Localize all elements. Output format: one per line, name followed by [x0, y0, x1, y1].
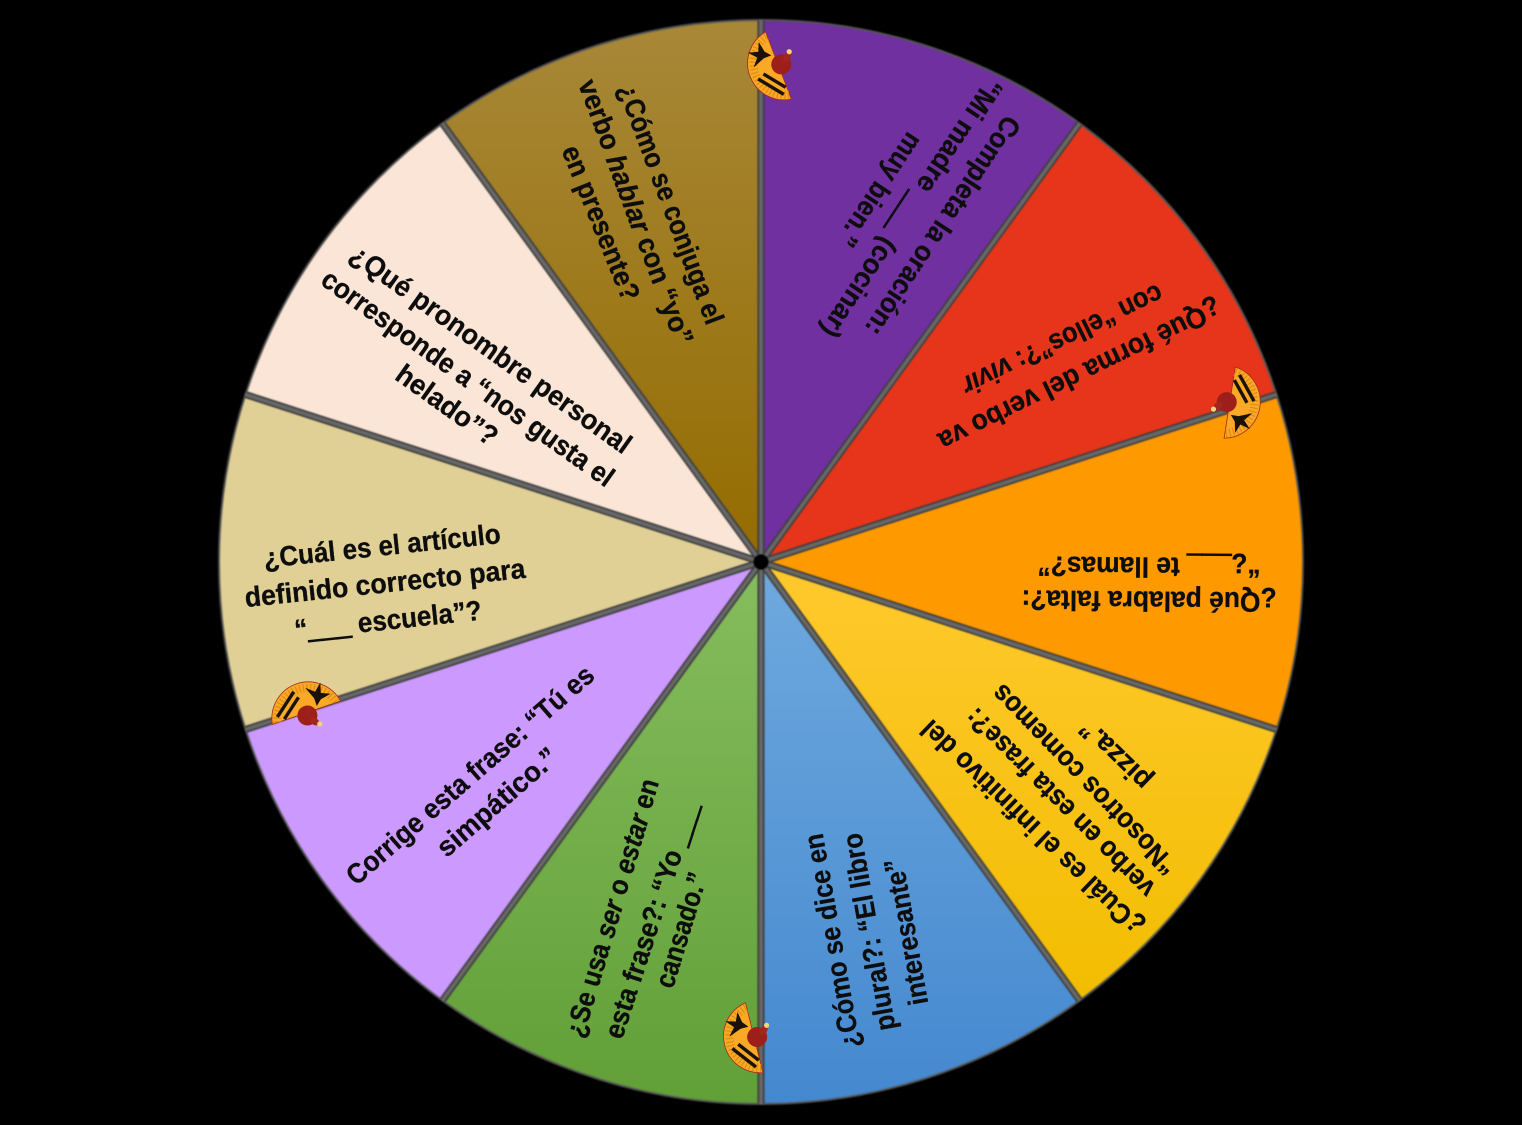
question: blue: interesante” — [878, 856, 934, 1008]
question: tan: “___ escuela”? — [293, 595, 483, 645]
wedge: yellow — [761, 562, 1276, 1000]
fan: left — [262, 672, 346, 741]
question: brown: verbo hablar con “yo” — [572, 75, 700, 349]
wedge: green — [442, 562, 761, 1104]
question: peach: helado”? — [390, 358, 504, 452]
question: tan: definido correcto para — [243, 553, 527, 613]
question: red: con “ellos”?: vivir — [956, 278, 1168, 403]
question: blue: plural?: “El libro — [836, 831, 902, 1033]
question: peach: ¿Qué pronombre personal — [344, 238, 638, 460]
question: blue — [798, 831, 934, 1051]
question: blue: ¿Cómo se dice en — [798, 831, 866, 1051]
question: green: cansado.” — [649, 869, 713, 991]
question: green — [559, 775, 713, 1042]
question: lilac: Corrige esta frase: “Tú es — [340, 659, 600, 891]
question: orange — [1021, 551, 1277, 618]
wedge: red — [761, 124, 1276, 562]
fan: bottom — [716, 999, 780, 1080]
question: tan: ¿Cuál es el artículo — [262, 518, 502, 574]
question: purple: Completa la oración: — [859, 110, 1027, 342]
fan: right — [1207, 364, 1265, 443]
question: peach: corresponde a “nos gusta el — [316, 263, 620, 493]
question: green: ¿Se usa ser o estar en — [559, 775, 665, 1041]
question: purple: muy bien.” — [831, 127, 929, 253]
wedge: brown — [442, 20, 761, 562]
wedge: orange — [761, 394, 1303, 730]
question: red: ¿Qué forma del verbo va — [933, 293, 1227, 457]
wedge: lilac — [246, 562, 761, 1000]
question: brown: ¿Cómo se conjuga el — [612, 80, 730, 328]
wedge: tan — [219, 394, 761, 730]
question: yellow: verbo en esta frase?: — [959, 702, 1161, 904]
question: brown: en presente? — [556, 141, 646, 305]
question: orange: “¿___ te llamas?” — [1037, 551, 1261, 583]
question: yellow: “Nosotros comemos — [985, 678, 1183, 882]
question: yellow: pizza.” — [1073, 713, 1157, 797]
question: lilac: simpático.” — [430, 741, 564, 863]
question: tan — [243, 518, 527, 645]
fan: top — [737, 26, 808, 110]
wheel wedges — [219, 20, 1303, 1104]
wedge: peach — [246, 124, 761, 562]
question: yellow: ¿Cuál es el infinitivo del — [914, 714, 1150, 942]
question: purple: “Mi madre ___ (cocinar) — [815, 72, 1009, 344]
question: green: esta frase?: “Yo ___ — [598, 797, 704, 1042]
wedge: purple — [761, 20, 1080, 562]
question: orange: ¿Qué palabra falta?: — [1021, 584, 1277, 618]
wedge: blue — [761, 562, 1080, 1104]
